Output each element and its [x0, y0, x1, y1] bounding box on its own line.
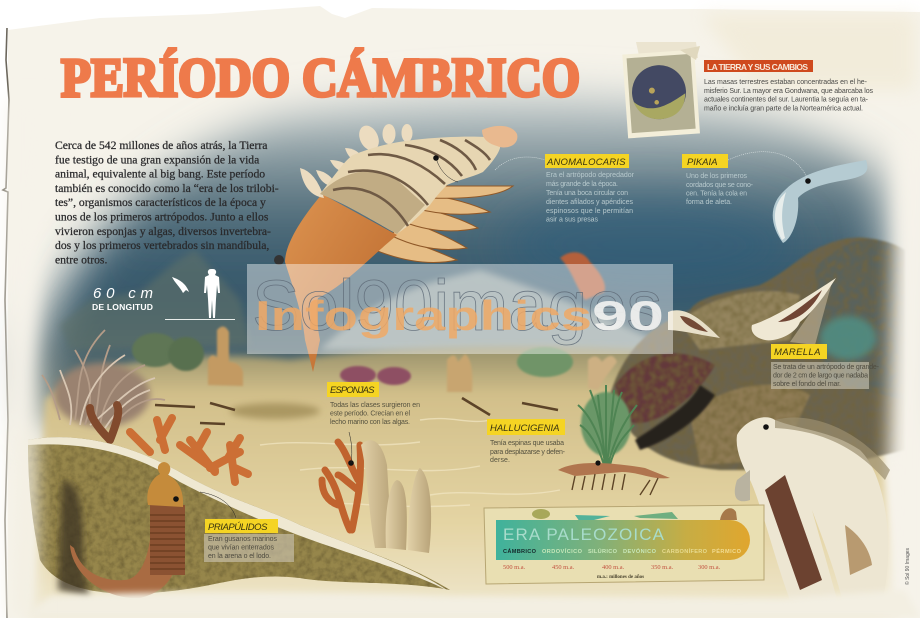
intro text: tes”, organismos característicos de la época y [55, 196, 266, 209]
photo card: earth globe [622, 42, 700, 138]
text: la tierra y sus cambios: misferio Sur. La mayor era Gondwana, que abarcaba los [704, 88, 874, 95]
intro text: dos y los primeros vertebrados sin mandíbula, [55, 239, 269, 252]
text: pikaia [686, 173, 754, 206]
lower fins [375, 186, 513, 262]
body and tail [285, 194, 397, 372]
intro text: también es conocido como la “era de los trilobi- [55, 182, 279, 195]
geological periods: CARBONÍFERO [662, 547, 708, 555]
callout dot: esponjas [348, 460, 354, 466]
text: pikaia: Uno de los primeros [686, 173, 748, 180]
text: esponjas: lecho marino con las algas. [330, 419, 410, 426]
geological periods [503, 547, 742, 555]
callout: marella giant skeleton [735, 417, 890, 610]
foreground coral and branching sponge [90, 405, 248, 482]
title: PERÍODO CÁMBRICO [61, 47, 580, 108]
mid-ground hallucigenia and seaweed [558, 385, 670, 495]
upper spines [300, 122, 412, 198]
text: hallucigenia: para desplazarse y defen- [490, 449, 566, 456]
watermark: 90 [592, 292, 664, 339]
marella large illustration [752, 278, 836, 345]
text: hallucigenia: derse. [490, 457, 510, 464]
geological periods: ORDOVÍCICO [542, 547, 583, 555]
geological periods: PÉRMICO [712, 547, 742, 555]
text: marella [771, 362, 880, 389]
watermark: Infographics [255, 292, 592, 339]
text: marella: Se trata de un artrópodo de grande- [773, 364, 880, 371]
gradient band [496, 520, 750, 560]
text: pikaia: cen. Tenía la cola en [686, 190, 747, 198]
text: anomalocaris: dientes afilados y apéndices [546, 199, 634, 206]
underwater scene background [32, 96, 905, 430]
watermark: Sol90images [252, 267, 662, 346]
background plants and sponges [132, 326, 617, 419]
credit: © Sol 90 Images [904, 547, 911, 585]
text: anomalocaris: espinosos que le permitían [546, 208, 633, 215]
scale comparison: DE LONGITUD [92, 302, 153, 312]
priapulid worm [70, 462, 236, 598]
text: esponjas: este período. Crecían en el [330, 410, 410, 418]
timeline ages: 500 m.a. [503, 564, 526, 571]
timeline panel: era paleozoica: m.a.: millones de años [597, 575, 644, 580]
text: anomalocaris: asir a sus presas [546, 216, 598, 224]
intro text [55, 139, 279, 266]
pikaia illustration [728, 152, 867, 243]
text: anomalocaris: Tenía una boca circular con [546, 190, 628, 197]
esponjas coral and tube sponges [322, 432, 431, 553]
text: priapulidos [204, 534, 294, 562]
label: esponjas: ESPONJAS [330, 385, 375, 396]
text: anomalocaris: más grande de la época. [546, 181, 618, 188]
text: hallucigenia: Tenía espinas que usaba [490, 440, 564, 447]
heading: la tierra y sus cambios: LA TIERRA Y SUS CAMBIOS [707, 62, 808, 72]
label: pikaia [682, 154, 728, 168]
intro text: fue testigo de una gran expansión de la vida [55, 153, 259, 166]
callout dot: marella [763, 424, 769, 430]
text: priapulidos: en la arena o el lodo. [208, 553, 271, 560]
bottom and left fade [14, 430, 920, 618]
foreground burrow cross-section [28, 437, 450, 598]
label: esponjas [327, 382, 379, 397]
geological periods: CÁMBRICO [503, 548, 537, 555]
small swimming creature [560, 252, 605, 300]
ribbed carapace [320, 137, 500, 234]
sandy seabed [30, 346, 900, 618]
scale comparison [92, 269, 235, 320]
timeline panel: era paleozoica: ERA PALEOZOICA [503, 525, 665, 544]
rock details [635, 316, 876, 450]
text: la tierra y sus cambios [704, 79, 874, 112]
text: pikaia: forma de aleta. [686, 199, 732, 206]
text: hallucigenia [490, 440, 566, 464]
callout dot: anomalocaris [433, 155, 439, 161]
text: la tierra y sus cambios: actuales continentes del sur. Laurentia la seguía en ta- [704, 96, 869, 104]
timeline ages [503, 564, 721, 571]
marella small illustration [668, 310, 720, 338]
callout dot: hallucigenia [595, 460, 601, 466]
label: hallucigenia: HALLUCIGENIA [490, 423, 560, 434]
callout dot: priapulid [173, 496, 179, 502]
callout dot: pikaia [805, 178, 811, 184]
text: anomalocaris: Era el artrópodo depredador [546, 172, 635, 179]
icon: human silhouette [204, 269, 220, 318]
text: esponjas [330, 402, 420, 426]
text: la tierra y sus cambios: Las masas terrestres estaban concentradas en el he- [704, 79, 868, 86]
text: la tierra y sus cambios: maño e incluía gran parte de la Norteamérica actual. [704, 106, 863, 112]
timeline ages: 450 m.a. [552, 564, 575, 571]
label: pikaia: PIKAIA [687, 157, 718, 168]
intro text: entre otros. [55, 253, 107, 266]
small trilobite creatures [155, 398, 558, 424]
intro text: vivieron esponjas y algas, diversos invertebra- [55, 225, 271, 238]
intro text: unos de los primeros artrópodos. Junto a ellos [55, 210, 269, 224]
intro text: animal, equivalente al big bang. Este período [55, 168, 265, 181]
geological periods: SILÚRICO [588, 548, 618, 555]
rocks on the right [610, 238, 905, 470]
text: pikaia: cordados que se cono- [686, 182, 754, 189]
scale comparison: 60 cm [93, 285, 155, 302]
text: marella: sobre el fondo del mar. [773, 381, 841, 388]
feathery seaweed on the left [42, 330, 165, 428]
anomalocaris illustration [274, 122, 545, 372]
text: priapulidos: Eran gusanos marinos [208, 536, 278, 543]
text: marella: dor de 2 cm de largo que nadaba [773, 372, 868, 380]
label: priapulidos [205, 519, 278, 533]
geological periods: DEVÓNICO [623, 547, 657, 555]
label: marella [771, 344, 827, 359]
head lobe [482, 126, 517, 148]
timeline ages: 350 m.a. [651, 564, 674, 571]
text: esponjas: Todas las clases surgieron en [330, 402, 420, 409]
text: priapulidos: que vivían enterrados [208, 544, 274, 552]
label: anomalocaris: ANOMALOCARIS [546, 157, 626, 168]
icons: ancient creatures [532, 508, 737, 522]
timeline ages: 400 m.a. [602, 564, 625, 571]
timeline ages: 300 m.a. [698, 564, 721, 571]
text: anomalocaris [546, 172, 635, 224]
label: marella: MARELLA [774, 347, 821, 358]
label: priapulidos: PRIAPÚLIDOS [208, 522, 268, 533]
intro text: Cerca de 542 millones de años atrás, la Tierra [55, 139, 267, 152]
icon: creature silhouette [172, 277, 189, 293]
timeline panel: era paleozoica [484, 505, 764, 584]
sand ripples [260, 419, 560, 506]
label: hallucigenia [487, 419, 565, 435]
